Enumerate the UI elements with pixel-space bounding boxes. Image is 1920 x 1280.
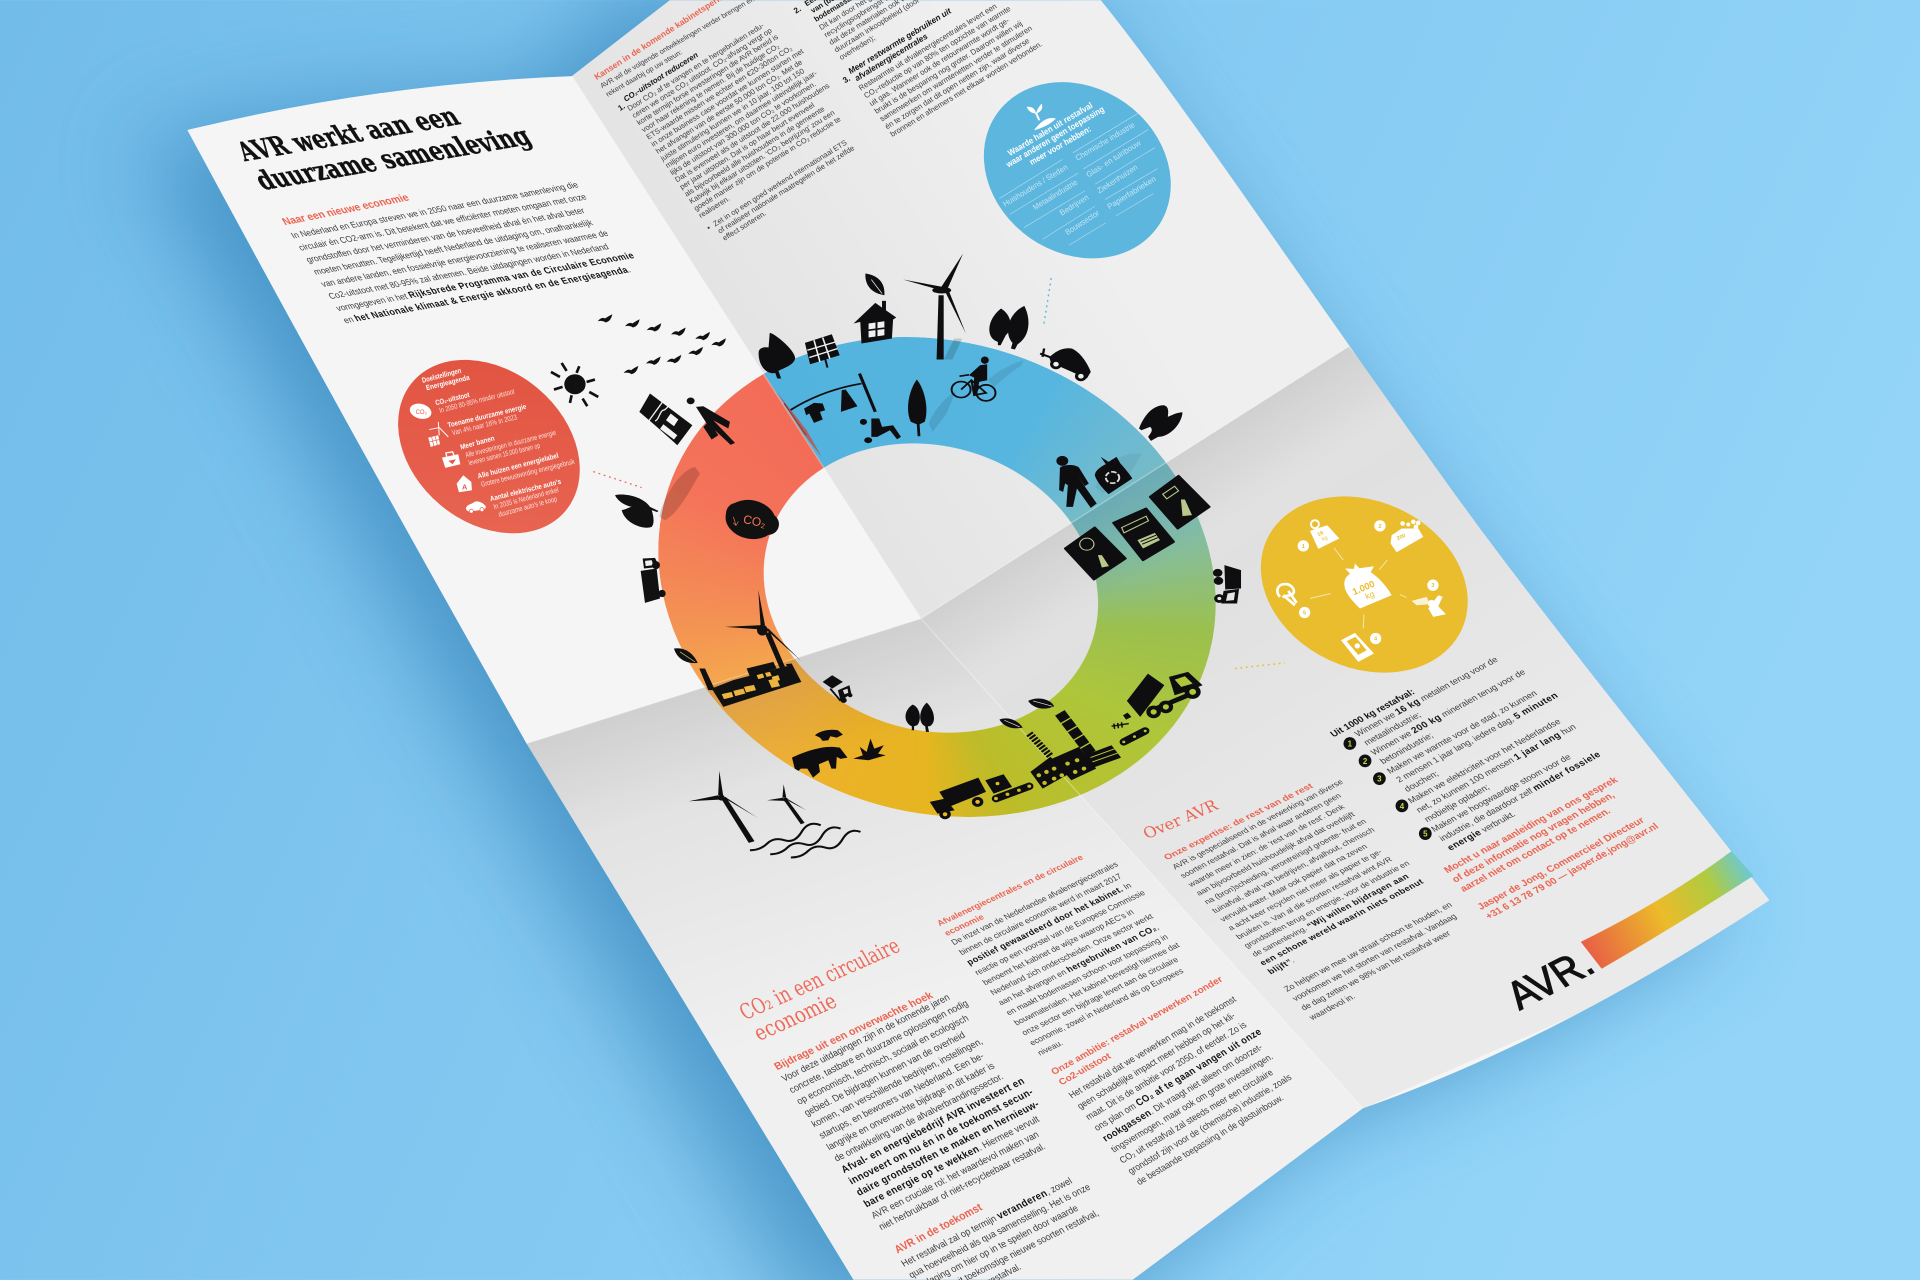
text: energy agenda goals: In 2050 80-95% minder uitstoot [438,387,515,415]
number badges [1298,520,1439,644]
text block: expertise: de samenleving. “Wij willen bijdragen aan [1249,872,1411,958]
text block: waste-to-energy plants: niveau. [1036,1039,1065,1057]
text block: expertise: waarde meer in zien: de ‘rest van de rest’. Denk [1186,802,1347,889]
text block: our ambition: tingsvermogen, maar ook om grote investeringen. [1109,1051,1275,1154]
text: item 1 body: in onze business case voordat we kunnen starten met [649,46,806,149]
text list: 1000 kg results: mobieltje opladen; [1422,782,1491,824]
text block: new economy: In Nederland en Europa streven we in 2050 naar een duurzame samenleving die [289,180,580,240]
icon: turbine and solar panel [428,422,448,447]
text: contact: aarzel niet om contact op te nemen. [1458,806,1613,894]
text block: our ambition: ons plan om CO₂ af te gaan vangen uit onze [1092,1026,1264,1134]
icon: weight 16 kg: kg [1321,535,1329,543]
number badges: 2 [1378,524,1382,530]
text block: expertise: blijft”. [1265,956,1297,976]
icon: minerals 200 kg: 200 [1396,533,1407,542]
text: energy agenda goals: Van 4% naar 16% in 2023 [451,412,518,437]
heading: our ambition: Co2-uitstoot [1057,1051,1113,1087]
heading: expertise: Onze expertise: de rest van de rest [1162,781,1315,862]
icon: shop [639,394,692,445]
text: item 3 body: én te zorgen dat dit open netten zijn, waar diverse [883,36,1031,131]
text: contact: Mocht u naar aanleiding van ons gesprek [1442,775,1621,876]
icon: house with label A [457,475,472,492]
text block: our ambition: geen schadelijke impact meer hebben op het kli- [1075,1010,1237,1111]
icon: wind turbine left [725,590,801,669]
text: energy agenda goals: Aantal elektrische auto's [489,477,562,503]
number badges: 4 [1400,802,1405,811]
text block: waste-to-energy plants: benoemt het kabinet de wijze waarop AEC's in [981,908,1136,987]
fold overlap: red wedge [777,392,822,457]
heading: waste-to-energy plants: economie [942,912,986,938]
icon: electronics container [1113,509,1174,560]
text list: 1000 kg results: net, zo kunnen 100 mensen 1 jaar lang hun [1414,722,1579,815]
text list: 1000 kg results: douchen; [1402,769,1440,794]
text: item 1 body: miljoen euro investeren, om daarmee uiteindelijk jaar- [664,68,819,170]
shadow: cyclist [988,360,1024,387]
icon: tree left [615,495,658,528]
text: contact [1442,775,1661,922]
panel: blue applications circle [949,46,1205,294]
icon: sprout [1027,104,1056,130]
text: item 3 body [857,0,1044,139]
text block: unexpected contribution: AVR een cruciale rol: het waardevol maken van [869,1129,1041,1221]
icon: conveyor right [1112,713,1147,743]
text block: unexpected contribution: daire grondstoffen te maken en hernieuw- [854,1099,1042,1199]
icon: conveyor with box [985,774,1031,800]
text block: our ambition: grondstof zijn voor de (chemische) industrie, zoals [1126,1072,1294,1176]
text list: 1000 kg results: energie verbruikt. [1445,809,1518,853]
text: item 1 body: of realiseer nationale maatregelen die het zelfde [716,143,856,235]
text block: expertise: bruiken is. Van al die soorten restafval wint AVR [1234,855,1394,941]
text: item 3 body: bruikt is de besparing nog groter. Daarom willen wij [873,19,1024,116]
icon: man [1056,456,1097,508]
text block: expertise: aan bijvoorbeeld huishoudelijk afval dat overblijft [1194,810,1357,897]
text block: waste-to-energy plants: positief gewaardeerd door het kabinet. In [965,880,1134,967]
text: energy agenda goals: Toename duurzame energie [447,402,527,430]
text block: unexpected contribution [780,984,1065,1232]
heading: new economy: Naar een nieuwe economie [280,192,412,228]
number badges: 1 [1302,544,1305,550]
text block: waste-to-energy plants: reactie op een voorstel van de Europese Commissie [973,888,1147,977]
icon: truck left [641,558,666,603]
text: item 1 body: Katwijk bij elkaar uitstoten. ‘CO₂ beprijzing’ zou een [687,108,836,206]
text: application sectors: Chemische industrie [1074,120,1137,163]
icons: top of the ring [759,254,1241,604]
text: item 1 body: effect sorteren. [721,209,768,243]
text block: expertise [1170,778,1441,976]
shadow: turbine [944,339,962,360]
text block: waste-to-energy plants: binnen de circulaire economie werd in maart 2017 [957,872,1124,957]
text block: clean streets [1281,900,1480,1022]
text block: expertise: AVR is gespecialiseerd in de verwerking van diverse [1171,778,1346,871]
icon: grass [853,739,886,760]
text block: AVR in the future: qua hoeveelheid als qua samenstelling. Het is onze [907,1182,1092,1280]
text: item 3: afvalenergiecentrales [852,31,930,83]
icon: waves [750,824,861,858]
icon: glass container [1065,528,1126,580]
text: item 1 body: per jaar uitstoten. Dat is op haar beurt evenveel [678,100,816,191]
text block: waste-to-energy plants: Nederland zich onderscheiden. Onze sector werkt [989,912,1156,997]
number badges: 5 [1303,611,1306,617]
text: energy agenda goals: CO₂-uitstoot [434,390,471,407]
icon: power plant [1029,713,1121,789]
text block: unexpected contribution: startups, en bewoners van Nederland. Een be- [817,1051,986,1141]
text block: unexpected contribution: niet herbruikbaar of niet-recycleebaar restafval. [877,1141,1047,1232]
text list: 1000 kg results [1348,644,1617,853]
text: item 3: Meer restwarmte gebruiken uit [846,5,954,76]
number badges: 3 [1431,583,1435,589]
text: circle heading: meer voor hebben: [1028,124,1093,167]
circular economy ring [658,337,1216,817]
text: contact: of deze informatie nog vragen hebben, [1450,790,1617,885]
text block: our ambition: maat. Dit is de ambitie voor 2050, of eerder. Zo is [1083,1019,1249,1122]
text: application sectors: Metaalindustrie [1031,177,1080,212]
text: application sectors: Papierfabrieken [1106,174,1158,211]
icon: CO2 cloud [722,495,779,544]
icon: forklift [823,675,852,703]
text block: unexpected contribution: concrete, tastbare en duurzame oplossingen nodig [787,998,970,1095]
icon: cypress tree [908,380,926,436]
dotted connector yellow [1235,663,1285,669]
icons: bottom of the ring [689,672,1203,858]
icon: wind turbine [903,254,966,360]
icon: leaf B [1028,699,1054,709]
text: item 1 body: het afvangen van de eerste 50.000 ton CO₂. Met de [654,58,804,156]
text list: 1000 kg results: industrie, die daardoor zelf minder fossiele [1437,750,1603,844]
text block: our ambition [1067,994,1306,1187]
panel: red goals circle [364,324,614,569]
text block: waste-to-energy plants: economie, zowel in Nederland als op Europees [1028,967,1185,1047]
icon: phone [1341,633,1374,662]
title: CO2 in a circular economy [735,934,917,1047]
text block: new economy: van andere landen, een fossielvrije energievoorziening te realiseren waarmee de [319,228,610,289]
icon: garbage bag 1000 kg: kg [1363,589,1376,601]
text: application sectors: Glas- en tuinbouw [1085,138,1143,179]
text: item 2: overheden); [837,33,877,62]
text: item 1 title: CO₂-uitstoot reduceren [622,50,700,104]
icon: factory left [699,662,801,707]
text: application sectors: Huishoudens / Steden [1001,163,1069,209]
text block: unexpected contribution: Afval- en energiebedrijf AVR investeert en [839,1076,1027,1176]
icons: left side of the ring [598,314,822,707]
text block: unexpected contribution: gebied. De bijdragen kunnen van de overheid [802,1030,967,1118]
text block: our ambition: rookgassen. Dit vraagt niet alleen om doorzet- [1100,1042,1265,1144]
text block: unexpected contribution: innoveert om nu én in de toekomst secun- [847,1087,1036,1187]
icon: trees bottom [906,705,920,730]
icon: tree pair [759,333,795,379]
text: energy agenda goals: Energieagenda [425,373,471,392]
text block: waste-to-energy plants: en maakt bodemassen schoon voor toepassing in [1004,932,1170,1017]
icon: recycling bag [1095,457,1132,494]
logo: AVR: AVR. [1497,940,1602,1018]
text list: 1000 kg results: Winnen we 200 kg mineralen terug voor de [1369,667,1528,758]
text: item 1 body: Door CO₂ af te vangen en te hergebruiken redu- [626,21,766,113]
text block: waste-to-energy plants: onze sector een bijdrage levert aan de circulaire [1020,955,1181,1037]
icon: tree right [1139,405,1183,441]
title: CO2 in a circular economy: CO₂ in een circulaire [735,934,905,1025]
shadow: cypress [929,390,956,432]
text block: clean streets: voorkomen we het storten van restafval. Vandaag [1290,911,1459,1003]
text block: unexpected contribution: bare energie op te wekken. Hiermee vervult [862,1114,1042,1210]
text: item 1 title: 1. [616,102,627,113]
text block: expertise: grondstoffen terug en energie, voor de industrie en [1242,859,1411,950]
icon: garbage bag 1000 kg: 1.000 [1351,579,1376,597]
text list: 1000 kg results: Maken we warmte voor de stad, zo kunnen [1385,688,1539,776]
text block: unexpected contribution: de ontwikkeling van de afvalverbrandingssector. [832,1071,1005,1164]
icon: solar panel [805,334,840,368]
title [229,91,537,196]
heading: waste-to-energy plants: Afvalenergiecentrales en de circulaire [935,852,1085,928]
text: item 1 body: lijks de uitstoot van 300.000 ton CO₂ te voorkomen. [668,79,818,177]
title: AVR werkt aan een [229,100,466,167]
text: energy agenda goals: Alle investeringen in duurzame energie [464,428,557,460]
icon: birds [598,314,726,374]
title: CO2 in a circular economy: economie [750,989,842,1046]
icon: clothes line [784,374,875,435]
text block: clean streets: Zo helpen we mee uw straat schoon te houden, en [1282,900,1454,993]
text: contact: Jasper de Jong, Commercieel Directeur [1475,815,1647,912]
text block: our ambition: CO₂ uit restafval zal steeds meer een circulaire [1117,1067,1275,1165]
text: item 3 body: uit gas. Wanneer ook de retourwarmte wordt ge- [867,16,1011,108]
number badges: 3 [1377,775,1382,784]
icon: CO2 cloud [408,401,433,421]
icon: dump truck [1127,672,1203,718]
text list: 1000 kg results: Maken we elektriciteit voor het Nederlandse [1406,717,1563,805]
icon: electric car [1040,348,1091,381]
title: about AVR: Over AVR [1139,795,1222,843]
text block: unexpected contribution: op economisch, technisch, sociaal en ecologisch [795,1013,971,1107]
text: application sectors: Ziekenhuizen [1096,163,1139,195]
icon: weight 16 kg: 16 [1317,530,1325,538]
icon: sun [551,363,598,406]
text block: new economy: moeten benutten. Tegelijkertijd heeft Nederland de uitdaging om, onafhankelijk [311,218,595,277]
text block: unexpected contribution: langrijke en onverwachte bijdrage in dit kader is [824,1060,997,1152]
text: application sectors [1001,120,1158,237]
text block: expertise: na (bron)scheiding, verontreinigd groente- fruit en [1202,817,1368,906]
title: duurzame samenleving [248,120,537,196]
text block: expertise: vervuild water. Maar ook papier dat na zeven [1218,842,1369,924]
text: item 1 body: als bijvoorbeeld alle huishoudens in de gemeente [683,104,826,198]
icon: tree [1008,306,1028,350]
poster content [240,0,1754,1280]
text list: 1000 kg results: metaalindustrie; [1362,710,1423,747]
text: item 3 body: samenwerken om warmtenetten verder te stimuleren [878,24,1034,123]
number badges: 5 [1423,830,1428,839]
text: item 1 body: goede manier zijn om de potentie in CO₂ reductie te [692,114,842,213]
text: item 1 body: Dat is evenveel als de uitstoot die 22.000 huishoudens [673,81,831,184]
dotted connector red [593,472,642,488]
number badges: 2 [1363,757,1368,766]
number badges: 1 [1348,739,1353,748]
text list: 1000 kg results: Maken we hoogwaardige stoom voor de [1429,752,1573,834]
text block: new economy: circulair én CO2-arm is. Dit betekent dat we efficiënter moeten omgaan met onze [296,192,589,252]
text block: expertise: soorten restafval. Dat is afval waar anderen geen [1178,792,1343,880]
text block: expertise: tuinafval, afval van bedrijven, afvalhout, chemisch [1210,826,1377,915]
text: circle heading: waar anderen geen toepassing [1004,104,1106,170]
icon: leaf [865,274,884,295]
text block: new economy: en het Nationale klimaat & Energie akkoord en de Energieagenda. [341,265,633,326]
text: opportunities intro: rekent daarbij op uw steun: [604,48,684,98]
text: item 1 body: • [705,223,713,232]
icon: bottle container [1150,476,1209,529]
logo: gradient band [1581,851,1753,969]
text block: clean streets: de dag zetten we 98% van het restafval weer [1298,928,1453,1012]
text: energy agenda goals: Alle huizen een energielabel [477,451,559,481]
icon: house [854,301,896,344]
panel: yellow 1000 kg circle [1232,464,1497,705]
text: item 1 body: juiste stimulering kunnen we in 10 jaar, 100 tot 150 [658,66,806,163]
text block: new economy: Co2-uitstoot met 80-95% zal afnemen. Beide uitdagingen worden in Nederland [326,242,611,301]
text block: our ambition: Het restafval dat we verwerken mag in de toekomst [1067,994,1238,1100]
icon: minerals 200 kg [1391,520,1423,552]
text block: new economy: grondstoffen door het verminderen van de hoeveelheid afval én het afval beter [304,206,587,265]
text block: AVR in the future: Het restafval zal op termijn veranderen, zowel [899,1176,1075,1270]
icon: calf [815,730,843,741]
heading: our ambition: Onze ambitie: restafval verwerken zonder [1049,974,1225,1077]
text block: waste-to-energy plants: aan het afvangen en hergebruiken van CO₂, [996,922,1161,1007]
icon: tree bottom right [920,703,934,732]
icon: leaf A [999,718,1023,728]
text: item 1 body: ceren we onze CO₂ uitstoot. CO₂-afvang vergt op [630,26,774,120]
icon: steam [1277,584,1297,605]
text block: expertise: een schone wereld waarin niets onbenut [1257,877,1426,967]
text: item 3 body: bronnen en afnemers met elkaar worden verbonden. [888,39,1044,139]
number badges [1344,737,1432,840]
text block: clean streets: waardevol in. [1306,992,1357,1022]
icon: sitting person [860,419,901,443]
icon: CO2 cloud: CO₂ [416,410,428,416]
icon: offshore wind turbines [689,771,806,843]
icon: cyclist [952,357,995,401]
icon: truck with box [930,778,986,819]
text: application sectors: Bedrijven [1058,193,1090,218]
heading: unexpected contribution: Bijdrage uit een onverwachte hoek [773,990,936,1073]
icon: leaf left [674,648,698,663]
text block: waste-to-energy plants [949,858,1210,1057]
text: item 3 body: Restwarmte uit afvalenergiecentrales levert een [857,2,999,92]
heading: AVR in the future: AVR in de toekomst [892,1201,985,1256]
text: circle heading: Waarde halen uit restafval [1006,100,1094,158]
text block: expertise: a acht keer recyclen niet meer als papier te ge- [1226,848,1384,932]
text block: unexpected contribution: Voor deze uitdagingen zijn in de komende jaren [780,992,952,1084]
text: item 1 body: korte termijn forse investeringen die AVR bereid is [635,32,780,127]
icon: woman with bags [687,398,735,445]
dotted connector blue [1044,278,1051,323]
shadow: red tree [659,467,700,520]
text list: 1000 kg results: 2 mensen 1 jaar lang, iedere dag, 5 minuten [1394,691,1561,785]
text: item 3: 3. [841,74,852,85]
text: item 2 [792,0,977,68]
text: item 1 body: ETS-waarde missen we echter een €20-30/ton CO₂ [645,44,794,141]
text: energy agenda goals: leveren samen 15.000 banen op [468,441,541,467]
text block: waste-to-energy plants: De inzet van de Nederlandse afvalenergiecentrales [949,860,1120,947]
text list: 1000 kg results: Winnen we 16 kg metalen terug voor de [1352,655,1501,739]
icon: CO2 cloud: CO₂ [742,512,767,531]
icon: electric car [466,501,486,513]
text: energy agenda goals [421,366,576,519]
fold shading [527,348,1376,803]
text: energy agenda goals: duurzame auto's te koop [497,494,558,519]
text: energy agenda goals: In 2035 is Nederland enkel [492,485,560,511]
icon: trees [989,309,1011,345]
icon: briefcase [442,452,460,468]
text block: waste-to-energy plants: bouwmaterialen. Het kabinet bevestigt hiermee dat [1012,941,1182,1027]
text block: our ambition: de bestaande toepassing in de glastuinbouw. [1134,1093,1286,1187]
text: item 3 body: CO₂-reductie op van 80% ten opzichte van warmte [862,4,1012,100]
icon: truck right [1213,565,1241,604]
text: energy agenda goals: Meer banen [459,433,496,451]
text: item 1 body: Zet in op een goed werkend internationaal ETS [711,138,849,228]
text: item 1 body: realiseren. [697,194,731,220]
number badges: 4 [1374,637,1378,643]
text block: new economy: vormgegeven in het Rijksbrede Programma van de Circulaire Economie [334,250,637,314]
icon: garbage bag 1000 kg [1344,564,1392,609]
text: energy agenda goals: Grotere bewustwording energiegebruik [480,457,576,489]
heading: from 1000 kg residual waste: Uit 1000 kg restafval: [1328,687,1417,739]
text: item 2: 2. [792,4,803,15]
icon: cow [792,747,848,778]
text block: unexpected contribution: komen, van verschillende bedrijven, instellingen, [810,1036,985,1129]
icon: weight 16 kg [1310,520,1339,549]
text: item 1 body [625,9,873,247]
icon: shower [1412,595,1446,617]
text list: 1000 kg results: betonindustrie; [1378,731,1435,766]
text: item 1 body: voor haar rekening te nemen. Bij de huidige CO₂ [640,42,781,134]
text: application sectors: Bouwsector [1064,208,1101,237]
shadow: bag [1095,454,1142,494]
icon: house with label A: A [462,483,468,492]
text: contact: +31 6 13 78 79 00 — jasper.de.jong@avr.nl [1484,821,1661,922]
text block: new economy [289,178,644,326]
text: energy agenda goals: Doelstellingen [421,366,463,385]
